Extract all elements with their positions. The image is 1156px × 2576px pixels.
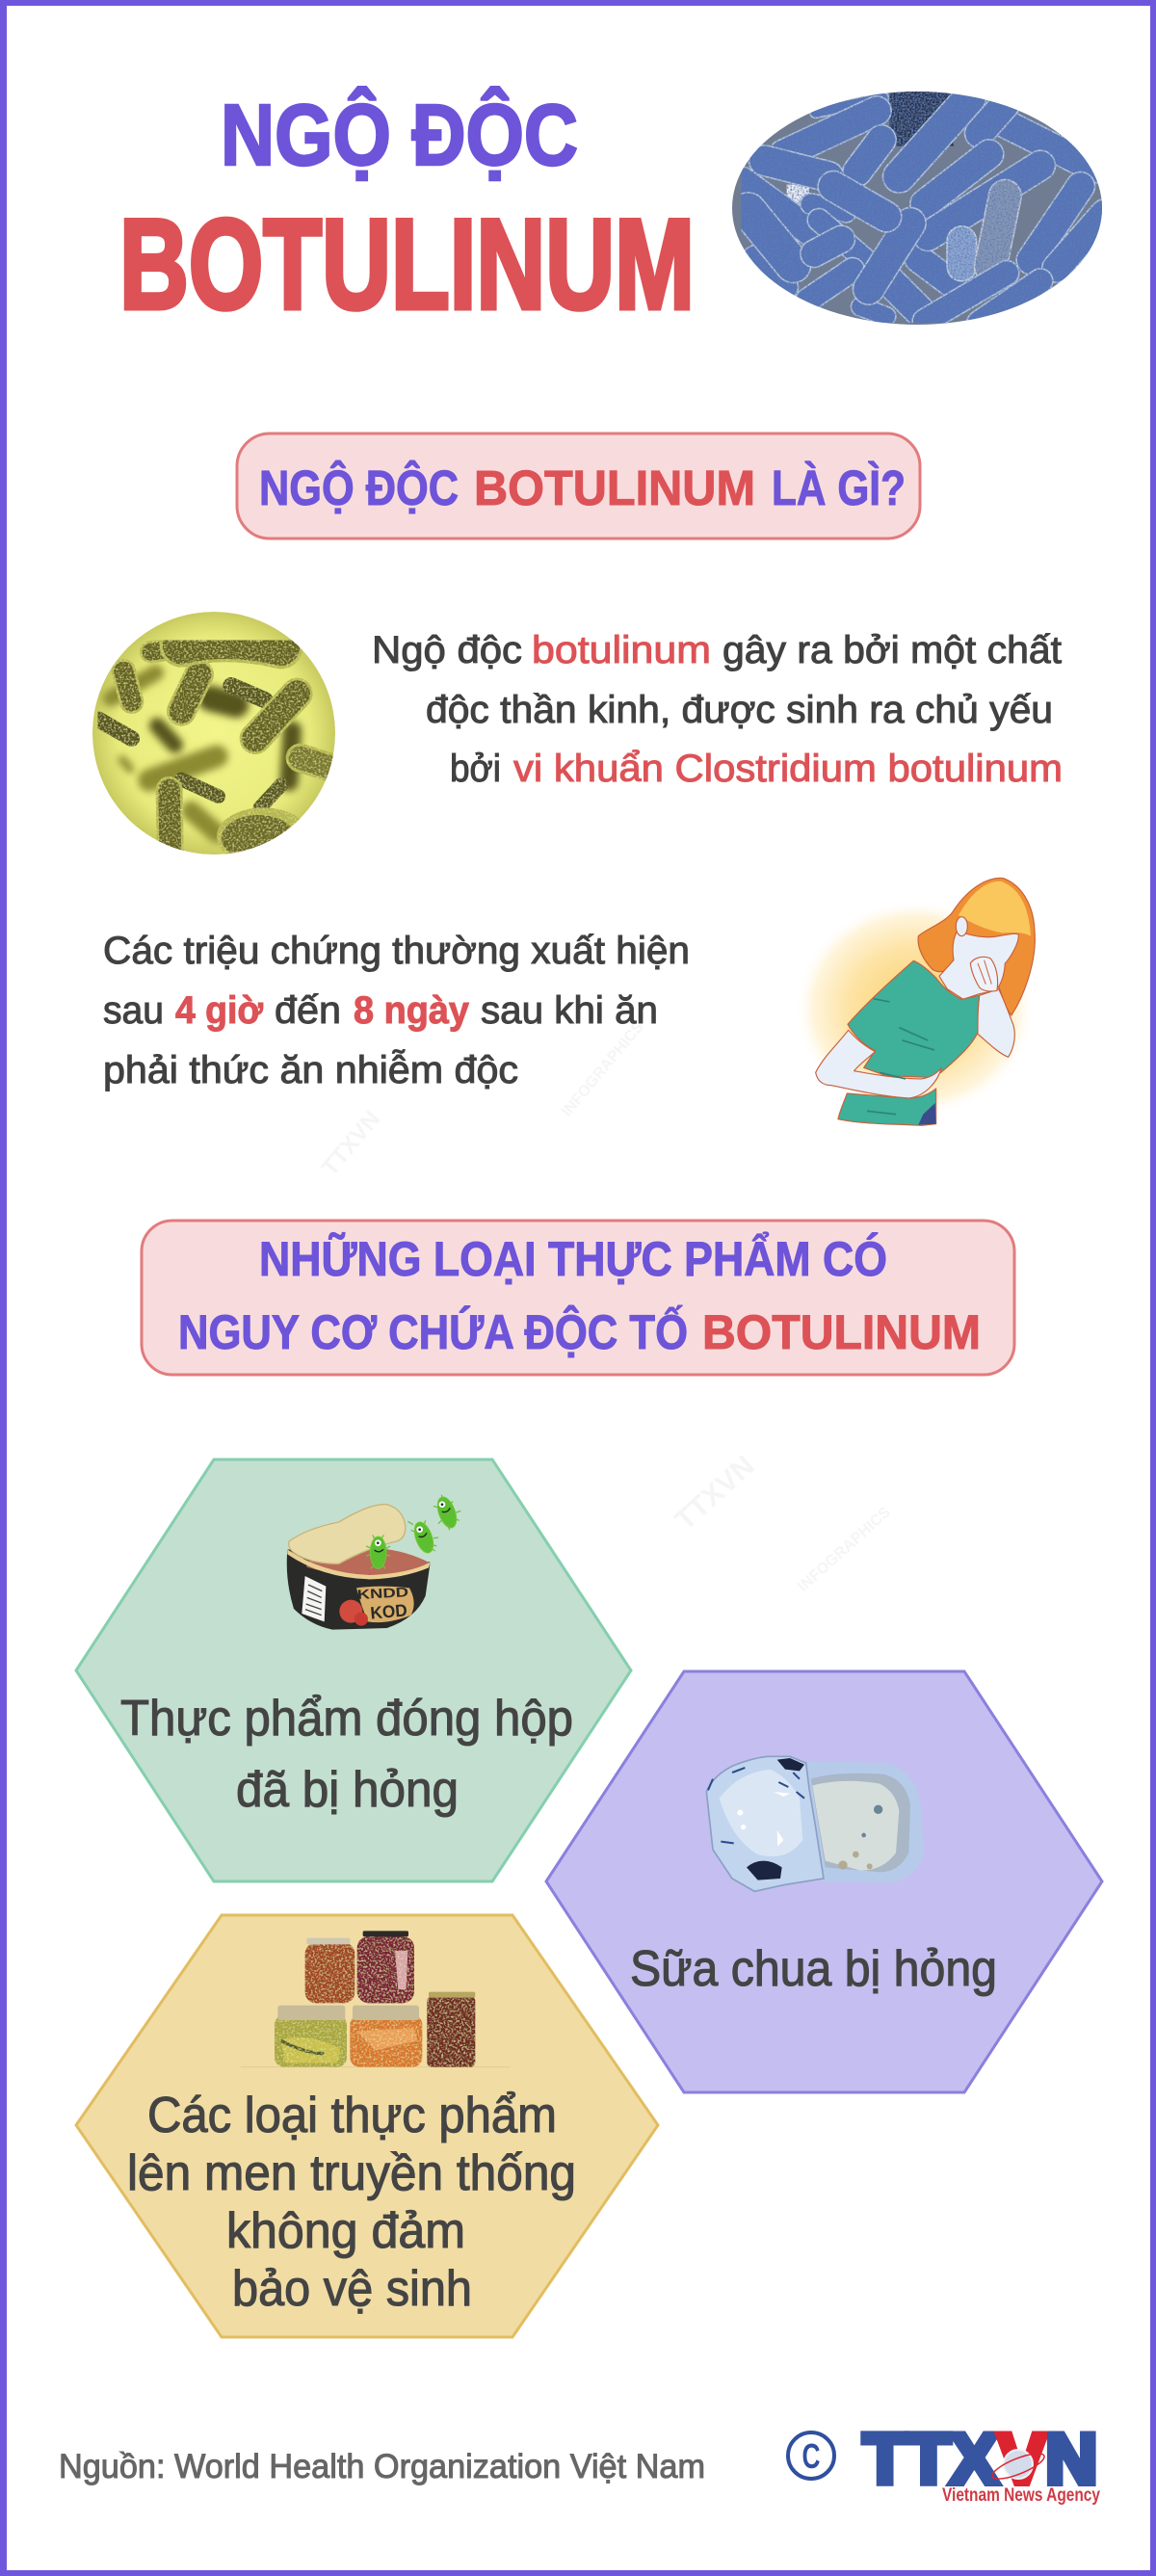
title line: ngộ độc: NGỘ ĐỘC [221, 86, 578, 184]
text block: definition [372, 629, 1063, 790]
text block: symptoms [103, 930, 690, 1091]
text block: symptoms: đến [275, 989, 341, 1032]
text: fermented food: không đảm [226, 2203, 465, 2259]
image: yellow bacteria [92, 612, 335, 865]
panel: fermented food hexagon [76, 1915, 658, 2337]
text block: symptoms: sau khi ăn [481, 989, 658, 1032]
text: canned food: đã bị hỏng [236, 1762, 459, 1818]
text block: definition: gây ra bởi một chất [722, 629, 1062, 671]
logo: TTXVN: TTXVN [863, 2420, 1097, 2499]
text: fermented food: Các loại thực phẩm [147, 2088, 557, 2143]
heading pill: what is botulinum: LÀ GÌ? [772, 460, 906, 515]
heading pill: what is botulinum: NGỘ ĐỘC [259, 460, 459, 515]
watermarks: TTXVN [670, 1450, 761, 1537]
icon: spoiled yogurt [706, 1756, 924, 1891]
heading pill: what is botulinum: BOTULINUM [474, 460, 755, 515]
text block: definition: bởi [450, 748, 501, 790]
title line: botulinum: BOTULINUM [119, 194, 695, 336]
text: fermented food: bảo vệ sinh [232, 2261, 472, 2317]
watermarks [317, 1018, 894, 1595]
heading pill: risky foods: NHỮNG LOẠI THỰC PHẨM CÓ [259, 1231, 887, 1286]
text block: symptoms: Các triệu chứng thường xuất hiện [103, 930, 690, 972]
logo: TTXVN: Vietnam News Agency [942, 2485, 1100, 2506]
panel: yogurt hexagon [546, 1671, 1102, 2092]
text block: symptoms: phải thức ăn nhiễm độc [103, 1048, 518, 1091]
text block: symptoms: 8 ngày [354, 989, 470, 1032]
watermarks: TTXVN [317, 1106, 385, 1181]
heading pill: risky foods [142, 1221, 1014, 1375]
watermarks: INFOGRAPHICS [795, 1504, 894, 1595]
text: yogurt: Sữa chua bị hỏng [630, 1941, 997, 1997]
image: blue bacteria [732, 92, 1102, 325]
illustration: sick woman [795, 878, 1036, 1125]
text: canned food: Thực phẩm đóng hộp [120, 1691, 573, 1747]
icon: spoiled can: KNDD [356, 1584, 408, 1602]
icon: spoiled can: KOD [370, 1600, 408, 1623]
icon: copyright: C [801, 2436, 821, 2476]
icon: spoiled can [287, 1494, 460, 1630]
text block: symptoms: 4 giờ [175, 989, 264, 1032]
title [119, 86, 695, 336]
panel: canned food hexagon [76, 1459, 631, 1881]
heading pill: risky foods: NGUY CƠ CHỨA ĐỘC TỐ [178, 1304, 688, 1359]
text: fermented food [127, 2088, 576, 2317]
text block: definition: vi khuẩn Clostridium botulinum [513, 748, 1063, 790]
text: canned food [120, 1691, 573, 1818]
heading pill: what is botulinum [237, 434, 920, 539]
text block: definition: Ngộ độc [372, 629, 522, 671]
text: fermented food: lên men truyền thống [127, 2145, 576, 2201]
heading pill: risky foods: BOTULINUM [702, 1305, 981, 1359]
source: Nguồn: World Health Organization Việt Nam [59, 2448, 705, 2485]
text block: definition: độc thần kinh, được sinh ra chủ yếu [426, 689, 1053, 731]
text block: definition: botulinum [532, 629, 711, 671]
text block: symptoms: sau [103, 989, 164, 1032]
watermarks: INFOGRAPHICS [559, 1018, 647, 1120]
icon: copyright [788, 2432, 834, 2479]
icon: jars [241, 1931, 511, 2067]
